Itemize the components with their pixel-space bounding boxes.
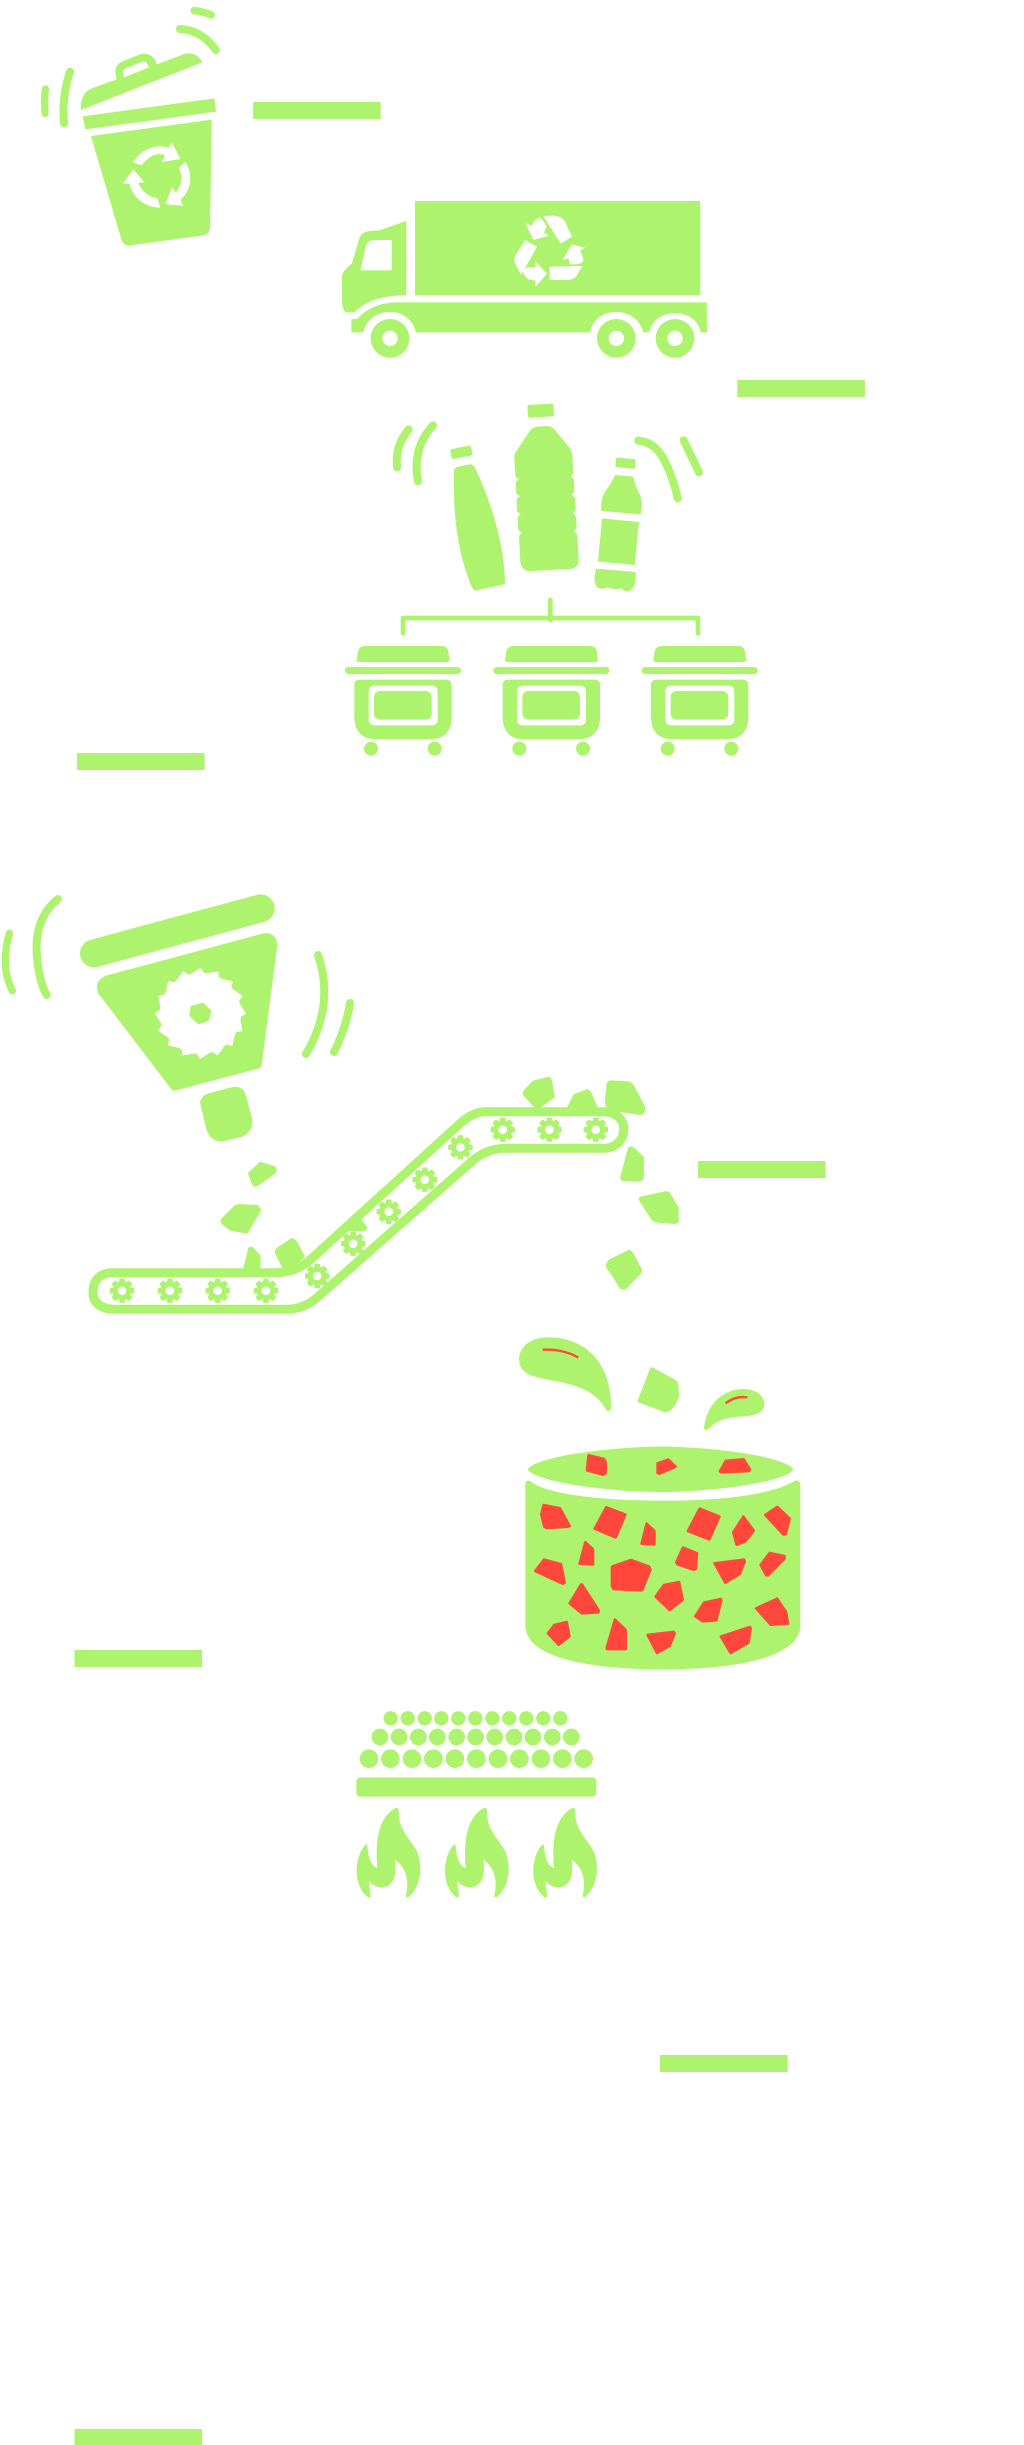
falling flakes right [606,1191,679,1290]
icon: shredder hopper [5,899,277,1091]
left bottle [450,445,505,591]
icon: melting pot with flakes [519,1337,800,1669]
step bar 2 [737,380,865,397]
pot top surface [528,1447,793,1492]
step bar 6 [660,2055,788,2072]
bin left [345,646,461,756]
pellets [360,1711,593,1768]
cargo box [415,201,700,295]
motion lines [397,425,699,498]
lid [81,53,202,110]
step bar 7 [74,2429,202,2445]
bin body [91,120,212,245]
icon: bottles sorted into bins [345,404,758,756]
melted pieces [535,1505,790,1653]
splash drop left [519,1337,611,1411]
step bar 1 [253,102,381,119]
splash drop right [704,1389,764,1430]
right bottle [595,458,642,591]
wheels [371,319,694,358]
flame left [357,1807,420,1897]
chute and flakes [200,1078,644,1269]
chassis [351,302,707,332]
hopper top bar [94,908,261,953]
recycle arrows [123,142,190,208]
pot body [525,1480,800,1669]
flakes on belt [222,1078,644,1269]
falling flake [637,1367,679,1412]
step bar 3 [77,753,205,770]
recycle symbol [514,216,585,287]
plate [356,1777,596,1797]
center bottle [514,404,579,571]
saw blade [156,969,245,1058]
bin right [642,646,758,756]
flame center [445,1807,509,1897]
icon: recycling truck [342,201,707,358]
motion lines [45,11,216,123]
conveyor gears [110,1118,608,1303]
motion lines left [5,899,58,995]
hopper body [97,933,277,1091]
icon: pellets heated over flames [356,1711,597,1897]
bin center [493,646,609,756]
step bar 5 [74,1650,202,1667]
cab [342,221,406,312]
blade hub [189,1003,211,1024]
motion lines right of hopper [306,955,350,1054]
flame right [533,1807,597,1897]
step bar 4 [698,1161,826,1178]
rim [83,98,216,129]
connector [403,600,698,633]
icon: recycling bin with open lid [45,11,216,245]
conveyor belt [93,1112,624,1309]
chute [200,1087,252,1141]
